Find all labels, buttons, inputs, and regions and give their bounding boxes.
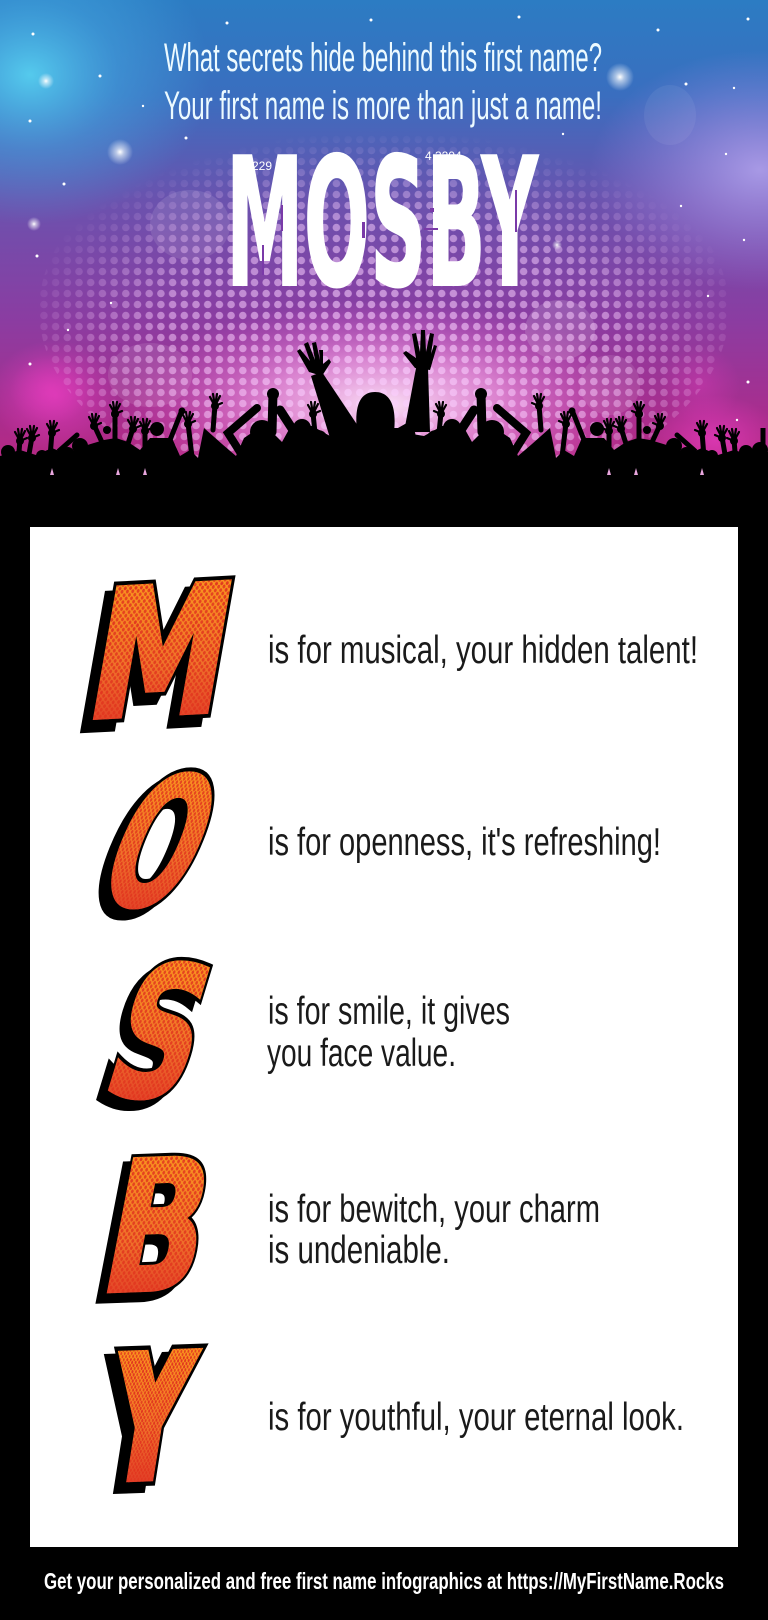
comic letter O: O bbox=[64, 746, 237, 956]
S description: you face value. bbox=[267, 1032, 456, 1075]
comic letter O: O bbox=[73, 739, 247, 949]
row O bbox=[64, 739, 661, 956]
intro heading bbox=[164, 36, 602, 128]
comic letter B: B bbox=[88, 1120, 228, 1335]
comic letter Y: Y bbox=[101, 1326, 198, 1512]
comic letter B: B bbox=[88, 1120, 228, 1335]
comic letter M: M bbox=[76, 547, 248, 760]
comic letter B: B bbox=[88, 1120, 228, 1335]
central figure with raised hands bbox=[297, 330, 437, 470]
comic letter M: M bbox=[76, 547, 248, 760]
comic letter S: S bbox=[85, 930, 234, 1139]
halftone light grid bbox=[40, 139, 726, 458]
comic letter B: B bbox=[80, 1127, 219, 1342]
comic letter S: S bbox=[76, 937, 226, 1146]
row B bbox=[80, 1120, 600, 1342]
comic letter Y: Y bbox=[91, 1333, 188, 1519]
comic letter M: M bbox=[66, 556, 239, 769]
B description: is undeniable. bbox=[268, 1229, 450, 1272]
concert background bbox=[0, 0, 768, 510]
row S bbox=[76, 930, 510, 1146]
right edge of crowd bbox=[750, 428, 768, 470]
crowd silhouette bbox=[0, 330, 768, 530]
name title: MOSBY bbox=[226, 120, 539, 327]
comic letter Y: Y bbox=[101, 1326, 198, 1512]
S description bbox=[267, 990, 510, 1075]
comic letter S: S bbox=[85, 930, 234, 1139]
row Y bbox=[91, 1326, 684, 1519]
comic letter O: O bbox=[73, 739, 247, 949]
comic letter Y: Y bbox=[101, 1326, 198, 1512]
comic letter O: O bbox=[73, 739, 247, 949]
row M bbox=[66, 547, 698, 769]
B description bbox=[268, 1188, 600, 1272]
S description: is for smile, it gives bbox=[268, 990, 510, 1033]
comic letter S: S bbox=[85, 930, 234, 1139]
B description: is for bewitch, your charm bbox=[268, 1188, 600, 1231]
comic letter M: M bbox=[76, 547, 248, 760]
name title: MOSBY: 4 3294 bbox=[425, 149, 462, 163]
white content panel bbox=[30, 527, 738, 1547]
left half of crowd bbox=[0, 388, 377, 480]
name title: MOSBY: 229 bbox=[252, 159, 272, 173]
sparkles bbox=[27, 16, 750, 421]
right half of crowd bbox=[377, 388, 754, 480]
